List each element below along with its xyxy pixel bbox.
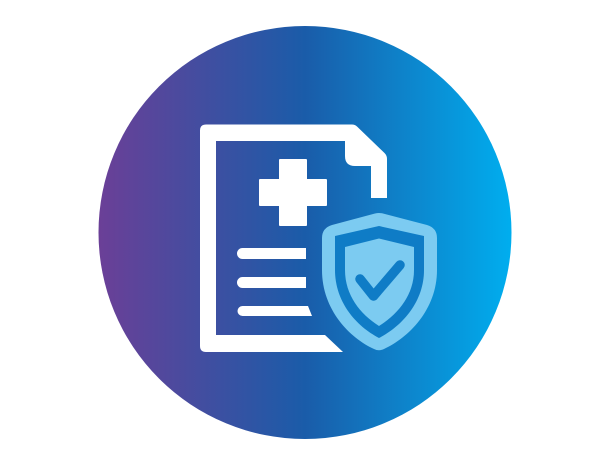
shield outer bbox=[322, 213, 437, 350]
document outline bbox=[200, 124, 387, 352]
icon: medical document bbox=[200, 124, 387, 352]
shield ring bbox=[335, 226, 424, 338]
text line 2 bbox=[237, 277, 306, 288]
text line 1 bbox=[237, 248, 306, 259]
text line 3 bbox=[238, 306, 312, 316]
shield inner bbox=[345, 238, 414, 326]
gradient circle background bbox=[98, 26, 512, 439]
check mark bbox=[360, 265, 400, 296]
icon: shield with check mark bbox=[322, 213, 437, 350]
icon: medical cross bbox=[259, 159, 327, 226]
